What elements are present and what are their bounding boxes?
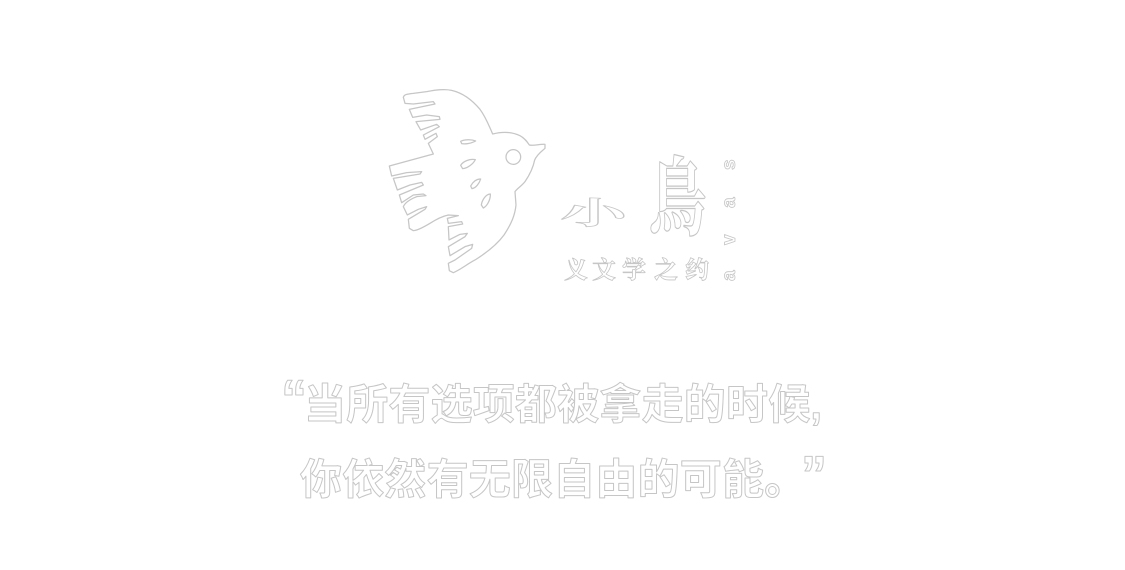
- vertical latin letters: a: [719, 270, 740, 281]
- brand name: 鳥: 鳥: [649, 129, 707, 253]
- tagline: [564, 250, 709, 285]
- opening quotation mark: “: [281, 370, 307, 428]
- quote line 1: 当所有选项都被拿走的时候,: [304, 381, 822, 428]
- brand name: 小: 小: [560, 188, 632, 233]
- icon: bird: [389, 90, 545, 273]
- closing quotation mark: ”: [801, 446, 827, 504]
- quote line 2: 你依然有无限自由的可能。: [300, 456, 806, 503]
- vertical latin letters: s: [719, 159, 740, 170]
- quote: [281, 370, 827, 504]
- tagline: 学: [622, 250, 646, 285]
- logo: bird and brand name: [389, 90, 740, 285]
- tagline: 之: [654, 250, 678, 285]
- tagline: 义: [564, 250, 588, 285]
- vertical latin letters: a: [719, 197, 740, 208]
- bird eye: [506, 150, 521, 164]
- vertical latin letters: [719, 159, 740, 281]
- tagline: 约: [685, 250, 709, 285]
- tagline: 文: [592, 250, 616, 285]
- vertical latin letters: v: [719, 234, 740, 245]
- bird body markings: [461, 140, 490, 208]
